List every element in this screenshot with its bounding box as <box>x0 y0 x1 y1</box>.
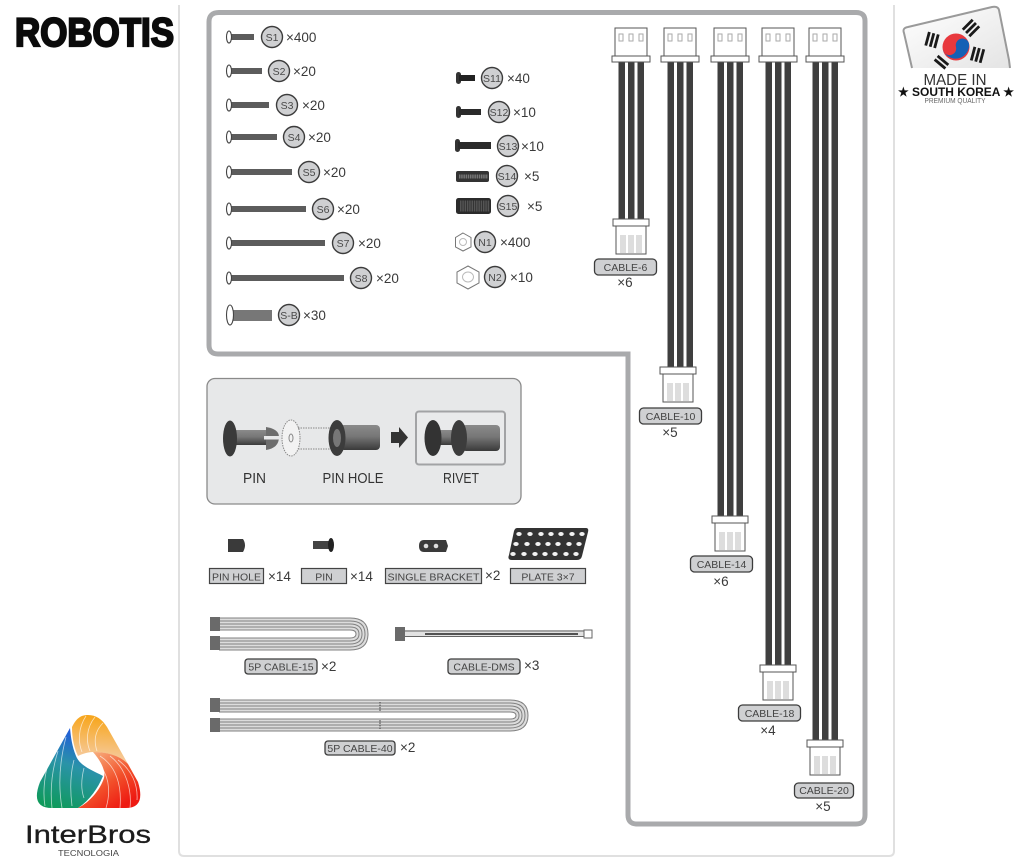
part: pin: PIN <box>315 572 333 584</box>
cable: CABLE-10: CABLE-10 <box>646 411 695 423</box>
screw S5: S5 <box>303 167 316 179</box>
panel: screws and cables frame <box>209 12 865 824</box>
cable: CABLE-14: CABLE-14 <box>697 559 746 571</box>
screw S8: S8 <box>355 273 368 285</box>
cable: 5P CABLE-15 <box>210 617 368 674</box>
nut N1 <box>456 232 530 252</box>
screw S11: ×40 <box>507 71 530 86</box>
screw S11: S11 <box>483 73 501 85</box>
part: pin hole: PIN HOLE <box>212 572 261 584</box>
cable: 5P CABLE-40 <box>210 698 528 755</box>
cable: CABLE-20: CABLE-20 <box>799 785 849 797</box>
cable: CABLE-DMS <box>395 627 592 674</box>
part: plate 3x7 <box>508 528 588 584</box>
cable: CABLE-6: ×6 <box>617 275 633 290</box>
nut N2 <box>457 266 533 289</box>
badge: made in South Korea: PREMIUM QUALITY <box>924 98 986 105</box>
screw S11 <box>456 68 530 88</box>
screw S-B: ×30 <box>303 308 326 323</box>
cable: CABLE-14: ×6 <box>713 574 729 589</box>
icon: rivet <box>424 420 500 456</box>
arrow <box>391 427 408 448</box>
screw S7 <box>226 232 381 254</box>
screw S5 <box>226 162 346 182</box>
icon: pin hole <box>328 420 380 456</box>
logo: InterBros: TECNOLOGIA <box>58 848 119 858</box>
part: single bracket <box>386 540 500 584</box>
screw S13 <box>455 136 544 156</box>
logo: InterBros <box>25 715 151 858</box>
pin labels: PIN HOLE <box>322 471 384 487</box>
screw S2: ×20 <box>293 64 316 79</box>
screw S2 <box>226 60 316 82</box>
screw S1 <box>226 26 316 48</box>
cable: CABLE-6: CABLE-6 <box>604 262 648 274</box>
screw S5: ×20 <box>323 165 346 180</box>
part: pin hole <box>210 539 291 584</box>
icon: washer and dashed guides <box>282 420 330 456</box>
pin labels: RIVET <box>443 471 479 487</box>
screw S8: ×20 <box>376 271 399 286</box>
part: pin hole: ×14 <box>268 569 291 584</box>
part: plate 3x7: PLATE 3×7 <box>521 572 575 584</box>
cable: CABLE-6 <box>594 28 656 290</box>
screw S15: ×5 <box>527 199 542 214</box>
screw S3 <box>226 94 325 116</box>
panel: pin and rivet assembly <box>207 378 521 504</box>
nut N2: N2 <box>488 272 502 284</box>
cable: CABLE-20: ×5 <box>815 799 831 814</box>
screw S12: S12 <box>490 107 508 119</box>
part: pin: ×14 <box>350 569 373 584</box>
cable: CABLE-10 <box>640 28 702 440</box>
badge: made in South Korea <box>898 7 1014 105</box>
screw S15 <box>456 196 542 216</box>
cable: 5P CABLE-40: 5P CABLE-40 <box>327 743 393 755</box>
pin labels <box>243 471 479 487</box>
screw S6 <box>226 198 360 220</box>
nut N1: ×400 <box>500 235 530 250</box>
part: single bracket: ×2 <box>485 568 500 583</box>
screw S1: ×400 <box>286 30 316 45</box>
screw S4 <box>226 126 331 148</box>
screw S12 <box>456 102 536 122</box>
cable: CABLE-10: ×5 <box>662 425 678 440</box>
screw S3: S3 <box>281 100 294 112</box>
screw S3: ×20 <box>302 98 325 113</box>
logo: ROBOTIS: ROBOTIS <box>15 11 174 55</box>
cable: 5P CABLE-15: ×2 <box>321 659 336 674</box>
badge: made in South Korea: MADE IN <box>924 72 986 89</box>
screw S14: ×5 <box>524 169 539 184</box>
cable: CABLE-18: ×4 <box>760 723 776 738</box>
part: pin <box>302 538 373 584</box>
pin labels: PIN <box>243 471 266 487</box>
cable: CABLE-DMS: ×3 <box>524 658 539 673</box>
screw S7: S7 <box>337 238 350 250</box>
screw S14: S14 <box>498 171 516 183</box>
cable: CABLE-14 <box>690 28 752 589</box>
cable: 5P CABLE-40: ×2 <box>400 740 415 755</box>
cable: CABLE-20 <box>794 28 854 814</box>
screw S13: ×10 <box>521 139 544 154</box>
page card <box>179 5 894 856</box>
cable: CABLE-18: CABLE-18 <box>745 708 794 720</box>
screw S14 <box>456 166 539 186</box>
badge: made in South Korea: ★ SOUTH KOREA ★ <box>898 85 1014 99</box>
cable: CABLE-DMS: CABLE-DMS <box>453 662 515 674</box>
cable: CABLE-18 <box>738 28 800 738</box>
cable: 5P CABLE-15: 5P CABLE-15 <box>248 662 314 674</box>
screw S1: S1 <box>266 32 279 44</box>
nut N1: N1 <box>478 237 492 249</box>
screw S12: ×10 <box>513 105 536 120</box>
screw S2: S2 <box>273 66 286 78</box>
nut N2: ×10 <box>510 270 533 285</box>
part: single bracket: SINGLE BRACKET <box>388 572 480 584</box>
screw S13: S13 <box>499 141 517 153</box>
screw S-B: S-B <box>280 310 298 322</box>
screw S15: S15 <box>499 201 517 213</box>
screw S4: ×20 <box>308 130 331 145</box>
screw S-B <box>226 304 326 326</box>
rivet highlight box <box>416 412 505 464</box>
screw S6: ×20 <box>337 202 360 217</box>
logo: InterBros: InterBros <box>25 821 151 849</box>
screw S4: S4 <box>288 132 301 144</box>
screw S6: S6 <box>317 204 330 216</box>
screw S7: ×20 <box>358 236 381 251</box>
screw S8 <box>226 268 399 288</box>
icon: pin <box>223 420 280 456</box>
